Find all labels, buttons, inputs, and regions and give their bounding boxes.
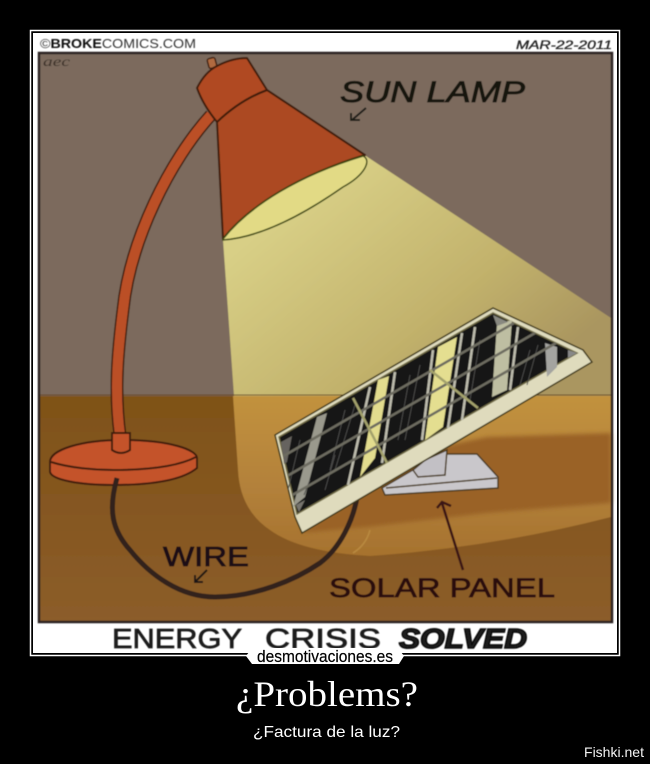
lamp shade [197,58,365,239]
comic caption: CRISIS [265,623,381,654]
watermark: Fishki.net [584,744,644,760]
arrow to panel [437,502,463,570]
solar panel [275,308,592,533]
wire [112,478,358,597]
panel reflections [281,315,577,512]
panel column lines [348,327,518,485]
panel shadow on table [300,433,611,533]
panel glass [279,313,577,514]
comic scene [39,53,612,622]
lamp base [50,433,197,485]
arrow to wire [195,570,207,582]
label: sun lamp: SUN LAMP [340,76,525,109]
wire reflection on table [353,530,370,553]
label: solar panel: SOLAR PANEL [329,573,555,603]
lamp opening [223,156,367,240]
signature: aec [43,55,71,70]
headline: ¿Problems? [236,674,418,714]
wall [39,53,612,396]
light beam on wall [223,156,611,396]
panel frame [275,308,592,533]
label: wire: WIRE [163,541,249,572]
comic caption [112,623,527,654]
panel streaks [288,340,538,495]
comic frame [30,30,620,656]
solar panel stand [382,450,498,495]
site logo tab: desmotivaciones.es [257,647,393,666]
comic caption: SOLVED [399,623,527,654]
panel border [39,53,612,622]
panel cross braces [353,370,478,463]
horizon line [39,394,611,396]
comic header: date: MAR-22-2011 [516,38,612,52]
comic caption: ENERGY [112,623,242,654]
light pool on table [233,396,611,556]
panel row lines [284,323,556,495]
arrow to lamp [351,108,366,120]
table [39,396,612,622]
comic header: site credit: ©BROKE COMICS.COM [40,36,196,51]
lamp arm [117,115,211,435]
subtitle: ¿Factura de la luz? [253,724,400,741]
lamp nub [207,57,217,69]
